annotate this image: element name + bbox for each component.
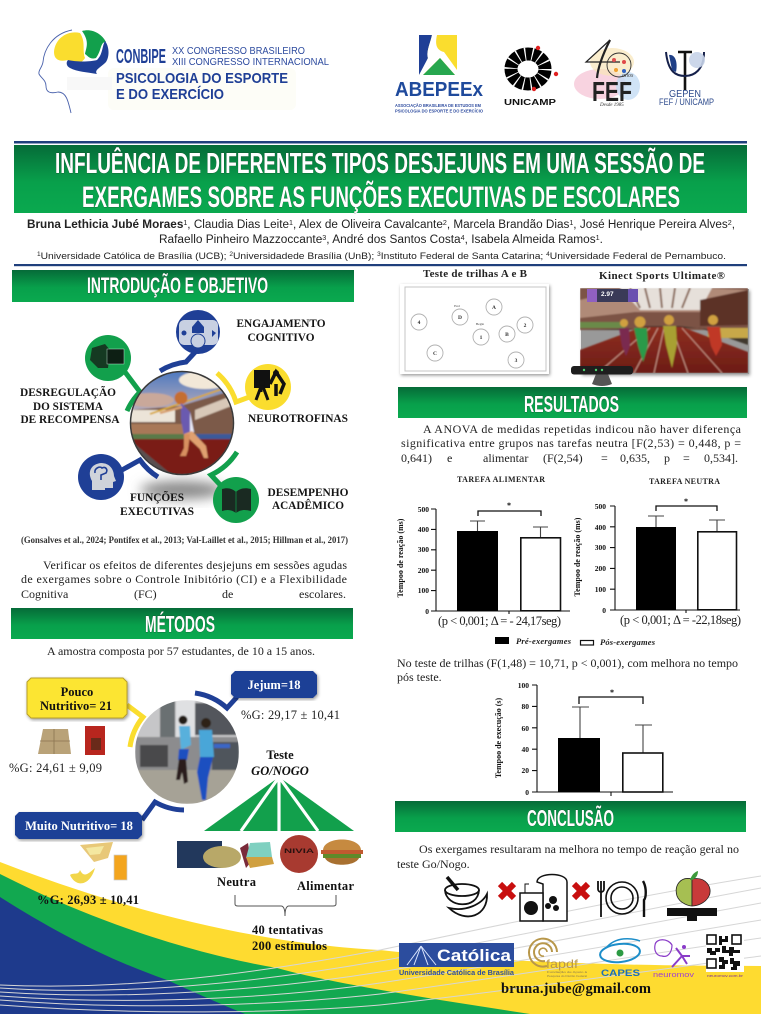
labels bbox=[20, 316, 348, 518]
bar chart: tarefa alimentar: 200 bbox=[418, 566, 429, 575]
header logo: 40 anos FEF: FEF bbox=[592, 76, 632, 107]
labels: NEUROTROFINAS bbox=[248, 411, 348, 425]
header logo: 40 anos FEF bbox=[574, 40, 640, 108]
affiliations: 2 bbox=[229, 252, 234, 258]
bar chart: tarefa neutra: 300 bbox=[595, 543, 606, 552]
labels: DESREGULAÇÃO bbox=[20, 385, 116, 399]
authors: , José Henrique Pereira Alves bbox=[573, 219, 728, 231]
authors: . bbox=[600, 234, 603, 246]
header logo: 40 anos FEF: anos bbox=[622, 73, 634, 79]
figure: trail making test: C bbox=[433, 351, 437, 357]
figure: trail making test: Begin bbox=[476, 322, 484, 326]
heading: conclusão bbox=[395, 801, 746, 832]
icon: brain on kinect bbox=[667, 871, 717, 921]
authors: 1 bbox=[569, 220, 573, 227]
affiliations: 4 bbox=[546, 252, 550, 258]
icon: bowl and banana bbox=[445, 877, 487, 916]
heading: introdução e objetivo: INTRODUÇÃO E OBJETIVO bbox=[87, 273, 268, 298]
title banner bbox=[14, 145, 747, 214]
bar chart: teste de trilhas: * bbox=[610, 688, 614, 697]
logo: católica: Católica bbox=[437, 946, 512, 965]
header logo: GEPEN: FEF / UNICAMP bbox=[659, 97, 714, 107]
box: pouco nutritivo: Pouco bbox=[61, 685, 93, 699]
logo: católica: Universidade Católica de Brasília bbox=[399, 970, 514, 977]
conclusion text: teste Go/Nogo. bbox=[397, 857, 470, 871]
bar chart: tarefa alimentar: 100 bbox=[418, 586, 429, 595]
trail test text: No teste de trilhas (F(1,48) = 10,71, p < 0,001), com melhora no tempo bbox=[397, 656, 738, 670]
header logo: CONBIPE: XIII CONGRESSO INTERNACIONAL bbox=[172, 57, 329, 68]
logo: católica bbox=[399, 943, 514, 977]
anova text: = bbox=[683, 451, 690, 465]
authors: 1 bbox=[596, 235, 600, 242]
figure: trail making test: B bbox=[505, 332, 509, 338]
anova text: = bbox=[601, 451, 608, 465]
caption: chart 2: (p < 0,001; Δ = -22,18seg) bbox=[620, 613, 741, 627]
stat: 24,61: %G: 24,61 ± 9,09 bbox=[9, 761, 102, 775]
bar chart: tarefa neutra: 100 bbox=[595, 585, 606, 594]
labels: ACADÊMICO bbox=[272, 498, 344, 512]
anova text: e bbox=[447, 451, 452, 465]
authors: Rafaello Pinheiro Mazzoccante bbox=[159, 234, 318, 246]
objective text: Verificar os efeitos de diferentes desjejuns em sessões agudas bbox=[43, 558, 347, 572]
track funnel bbox=[204, 777, 354, 831]
bar chart: tarefa alimentar: * bbox=[507, 501, 511, 510]
header logo: ABEPEEx: ASSOCIAÇÃO BRASILEIRA DE ESTUDOS EM bbox=[395, 103, 481, 108]
stat: 29,17: %G: 29,17 ± 10,41 bbox=[241, 708, 340, 722]
box: jejum: Jejum=18 bbox=[248, 678, 300, 692]
authors: 4 bbox=[461, 235, 465, 242]
soft shadow under photo bbox=[140, 481, 224, 499]
header logo: ABEPEEx: PSICOLOGIA DO ESPORTE E DO EXERCÍCIO bbox=[395, 108, 484, 114]
bar chart: tarefa neutra: 400 bbox=[595, 523, 606, 532]
authors: , Claudia Dias Leite bbox=[187, 219, 289, 231]
affiliations: Instituto Federal de Santa Catarina; bbox=[381, 251, 546, 262]
objective text: (FC) bbox=[134, 587, 157, 601]
chart title: tarefa neutra: TAREFA NEUTRA bbox=[649, 477, 720, 486]
photo: kinect game: 2.97 bbox=[601, 291, 614, 298]
objective text bbox=[21, 558, 347, 601]
bar chart: tarefa alimentar: 300 bbox=[418, 545, 429, 554]
figure: trail making test: 3 bbox=[515, 358, 518, 364]
bar chart: tarefa alimentar bbox=[396, 501, 570, 616]
logo: fapdf: Fundação de Apoio à bbox=[547, 970, 587, 974]
go/nogo label: GO/NOGO bbox=[251, 764, 309, 778]
header logo: UNICAMP: UNICAMP bbox=[504, 98, 557, 107]
logo: capes bbox=[599, 939, 641, 979]
anova text: 0,635, bbox=[620, 451, 650, 465]
bar chart: tarefa neutra: 500 bbox=[595, 502, 606, 511]
icon: engajamento cognitivo bbox=[176, 310, 220, 354]
qr code bbox=[706, 934, 744, 978]
figure: trail making test: D bbox=[458, 315, 462, 321]
box: muito nutritivo: Muito Nutritivo= 18 bbox=[25, 819, 133, 833]
authors: , André dos Santos Costa bbox=[326, 234, 461, 246]
qr code: neuromov.com.br bbox=[707, 974, 744, 978]
anova text bbox=[401, 422, 742, 465]
bar chart: tarefa neutra: 200 bbox=[595, 564, 606, 573]
go/nogo label bbox=[251, 748, 309, 778]
contact email: bruna.jube@gmail.com bbox=[501, 981, 651, 997]
authors: 1 bbox=[183, 220, 187, 227]
header logo: CONBIPE: XX CONGRESSO BRASILEIRO bbox=[172, 46, 305, 57]
anova text: alimentar bbox=[483, 451, 528, 465]
icon: juice and bag bbox=[520, 874, 567, 921]
icon: funções executivas bbox=[78, 454, 124, 500]
icon: crackers and chocolate bbox=[38, 726, 105, 755]
figure: trail making test: 1 bbox=[480, 335, 483, 341]
logo: fapdf: Pesquisa do Distrito Federal bbox=[547, 974, 587, 978]
header logo: GEPEN bbox=[659, 52, 714, 107]
stimuli images: NIVIA bbox=[284, 849, 315, 855]
affiliations: Universidadede Brasília (UnB); bbox=[233, 251, 377, 262]
labels: neutra and alimentar bbox=[217, 875, 354, 893]
figure: trail making test: End bbox=[454, 304, 460, 308]
labels: DESEMPENHO bbox=[268, 485, 348, 499]
anova text: 0,641) bbox=[401, 451, 432, 465]
authors: , Alex de Oliveira Cavalcante bbox=[293, 219, 443, 231]
bar chart: teste de trilhas: Tempoo de execução (s) bbox=[494, 697, 503, 778]
icon: desregulação bbox=[85, 335, 131, 381]
figure: trail making test: 2 bbox=[524, 323, 527, 329]
bar chart: teste de trilhas: 80 bbox=[522, 702, 529, 711]
chart title: tarefa alimentar: TAREFA ALIMENTAR bbox=[457, 475, 545, 484]
heading: resultados bbox=[398, 387, 747, 418]
connector arcs bbox=[127, 693, 237, 820]
heading: introdução e objetivo bbox=[12, 270, 354, 302]
central athlete photo bbox=[131, 372, 233, 474]
objective text: escolares. bbox=[299, 587, 346, 601]
conclusion icons bbox=[445, 871, 717, 921]
trials text bbox=[252, 923, 327, 953]
icon: plate and cutlery bbox=[598, 881, 646, 917]
anova text: A ANOVA de medidas repetidas indicou não haver diferença bbox=[423, 422, 742, 436]
authors: 1 bbox=[289, 220, 293, 227]
figure: trail making test: 4 bbox=[418, 320, 421, 326]
figure: trail making test: A bbox=[492, 305, 496, 311]
labels: DO SISTEMA bbox=[33, 399, 103, 413]
box: pouco nutritivo bbox=[27, 678, 127, 718]
anova text: p bbox=[664, 451, 670, 465]
top divider line bbox=[14, 141, 747, 144]
conclusion text: Os exergames resultaram na melhora no tempo de reação geral no bbox=[419, 842, 739, 856]
objective text: de bbox=[222, 587, 233, 601]
trail test text: pós teste. bbox=[397, 670, 442, 684]
bar chart: tarefa neutra bbox=[573, 497, 740, 615]
labels: ENGAJAMENTO bbox=[236, 316, 326, 330]
trials text: 200 estímulos bbox=[252, 939, 327, 953]
affiliations: 1 bbox=[37, 252, 41, 258]
icon: book bbox=[213, 477, 259, 523]
header logo: CONBIPE: E DO EXERCÍCIO bbox=[116, 86, 224, 103]
logo: neuromov bbox=[653, 940, 695, 979]
legend: Pré-exergames bbox=[516, 636, 572, 646]
sample text: A amostra composta por 57 estudantes, de 10 a 15 anos. bbox=[47, 644, 315, 658]
background waves bbox=[0, 862, 761, 1014]
header logo: ABEPEEx: ABEPEEx bbox=[395, 79, 483, 101]
anova text: significativa entre grupos nas tarefas neutra [F(2,53) = 0,448, p = bbox=[401, 436, 741, 450]
logo: fapdf bbox=[529, 939, 587, 978]
bar chart: teste de trilhas: 20 bbox=[522, 766, 529, 775]
figure: trail making test bbox=[400, 284, 549, 374]
connector arcs bbox=[122, 350, 255, 490]
icon: second red x bbox=[574, 884, 588, 898]
citations: (Gonsalves et al., 2024; Pontifex et al., 2013; Val-Laillet et al., 2015; Hillman et al., 2017) bbox=[21, 535, 348, 545]
header logo: CONBIPE bbox=[39, 30, 329, 113]
labels: neutra and alimentar: Alimentar bbox=[297, 879, 354, 893]
icon: red x bbox=[500, 884, 514, 898]
objective text: de exergames sobre o Controle Inibitório (CI) e a Flexibilidade bbox=[21, 572, 347, 586]
affiliations: Universidade Católica de Brasília (UCB); bbox=[41, 251, 229, 262]
labels: COGNITIVO bbox=[248, 330, 314, 344]
label: kinect: Kinect Sports Ultimate® bbox=[599, 270, 725, 282]
bar chart: tarefa neutra: * bbox=[684, 497, 688, 506]
authors: Bruna Lethicia Jubé Moraes bbox=[27, 219, 183, 231]
bottom header divider bbox=[14, 264, 747, 266]
header logo: 40 anos FEF: Desde 1985 bbox=[599, 103, 624, 108]
logo: fapdf: fapdf bbox=[546, 957, 579, 971]
brace bbox=[235, 895, 336, 916]
header logo: CONBIPE: PSICOLOGIA DO ESPORTE bbox=[116, 70, 288, 87]
box: pouco nutritivo: Nutritivo= 21 bbox=[40, 699, 112, 713]
icon: neurotrofinas bbox=[245, 364, 291, 410]
labels: EXECUTIVAS bbox=[120, 504, 194, 518]
bar chart: tarefa alimentar: 500 bbox=[418, 505, 429, 514]
objective text: Cognitiva bbox=[21, 587, 69, 601]
heading: métodos: MÉTODOS bbox=[145, 610, 215, 637]
logo: neuromov: neuromov bbox=[653, 972, 695, 979]
bar chart: teste de trilhas: 0 bbox=[525, 788, 529, 797]
trials text: 40 tentativas bbox=[252, 923, 323, 937]
kinect sensor bbox=[571, 366, 633, 386]
logo: capes: CAPES bbox=[601, 968, 640, 979]
header logo: CONBIPE: CONBIPE bbox=[116, 46, 166, 68]
bar chart: tarefa neutra: Tempoo de reação (ms) bbox=[573, 517, 582, 596]
stat: 26,93: %G: 26,93 ± 10,41 bbox=[37, 893, 139, 907]
affiliations: 3 bbox=[377, 252, 382, 258]
panel: methods diagram bbox=[9, 671, 363, 953]
box: muito nutritivo bbox=[15, 812, 142, 839]
bar chart: tarefa alimentar: 0 bbox=[425, 607, 429, 616]
icon: toast juice banana bbox=[70, 842, 127, 883]
labels: neutra and alimentar: Neutra bbox=[217, 875, 257, 889]
authors: 3 bbox=[322, 235, 326, 242]
authors: , Isabela Almeida Ramos bbox=[465, 234, 596, 246]
conclusion text bbox=[397, 842, 739, 871]
caption: chart 1: (p < 0,001; Δ = - 24,17seg) bbox=[438, 614, 561, 628]
bar chart: teste de trilhas: 40 bbox=[522, 745, 529, 754]
classroom photo bbox=[135, 700, 239, 804]
trail test text bbox=[397, 656, 738, 684]
anova text: 0,534]. bbox=[704, 451, 738, 465]
bar chart: teste de trilhas: 100 bbox=[518, 681, 529, 690]
go/nogo label: Teste bbox=[266, 748, 294, 762]
affiliations: Universidade Federal de Pernambuco. bbox=[550, 251, 726, 262]
photo: kinect game bbox=[571, 288, 749, 386]
authors: 2 bbox=[443, 220, 447, 227]
bar chart: tarefa alimentar: 400 bbox=[418, 525, 429, 534]
header logo: UNICAMP bbox=[504, 46, 558, 107]
legend: Pós-exergames bbox=[600, 637, 656, 647]
legend bbox=[495, 636, 656, 647]
label: teste de trilhas: Teste de trilhas A e B bbox=[423, 268, 528, 280]
authors: , bbox=[732, 219, 735, 231]
panel: introduction diagram bbox=[20, 310, 348, 523]
bar chart: tarefa neutra: 0 bbox=[602, 606, 606, 615]
box: jejum bbox=[231, 671, 317, 698]
authors bbox=[27, 219, 735, 246]
authors: , Marcela Brandão Dias bbox=[447, 219, 570, 231]
anova text: (F(2,54) bbox=[543, 451, 583, 465]
authors: 2 bbox=[728, 220, 732, 227]
heading: métodos bbox=[11, 608, 353, 639]
stimuli images bbox=[177, 835, 363, 873]
heading: resultados: RESULTADOS bbox=[524, 391, 619, 417]
bar chart: tarefa alimentar: Tempoo de reação (ms) bbox=[396, 518, 405, 597]
header logo: ABEPEEx bbox=[395, 35, 484, 114]
labels: DE RECOMPENSA bbox=[20, 412, 120, 426]
heading: conclusão: CONCLUSÃO bbox=[527, 804, 614, 831]
labels: FUNÇÕES bbox=[130, 490, 184, 504]
header logo: GEPEN: GEPEN bbox=[669, 89, 701, 100]
bar chart: teste de trilhas bbox=[494, 681, 673, 797]
bar chart: teste de trilhas: 60 bbox=[522, 724, 529, 733]
